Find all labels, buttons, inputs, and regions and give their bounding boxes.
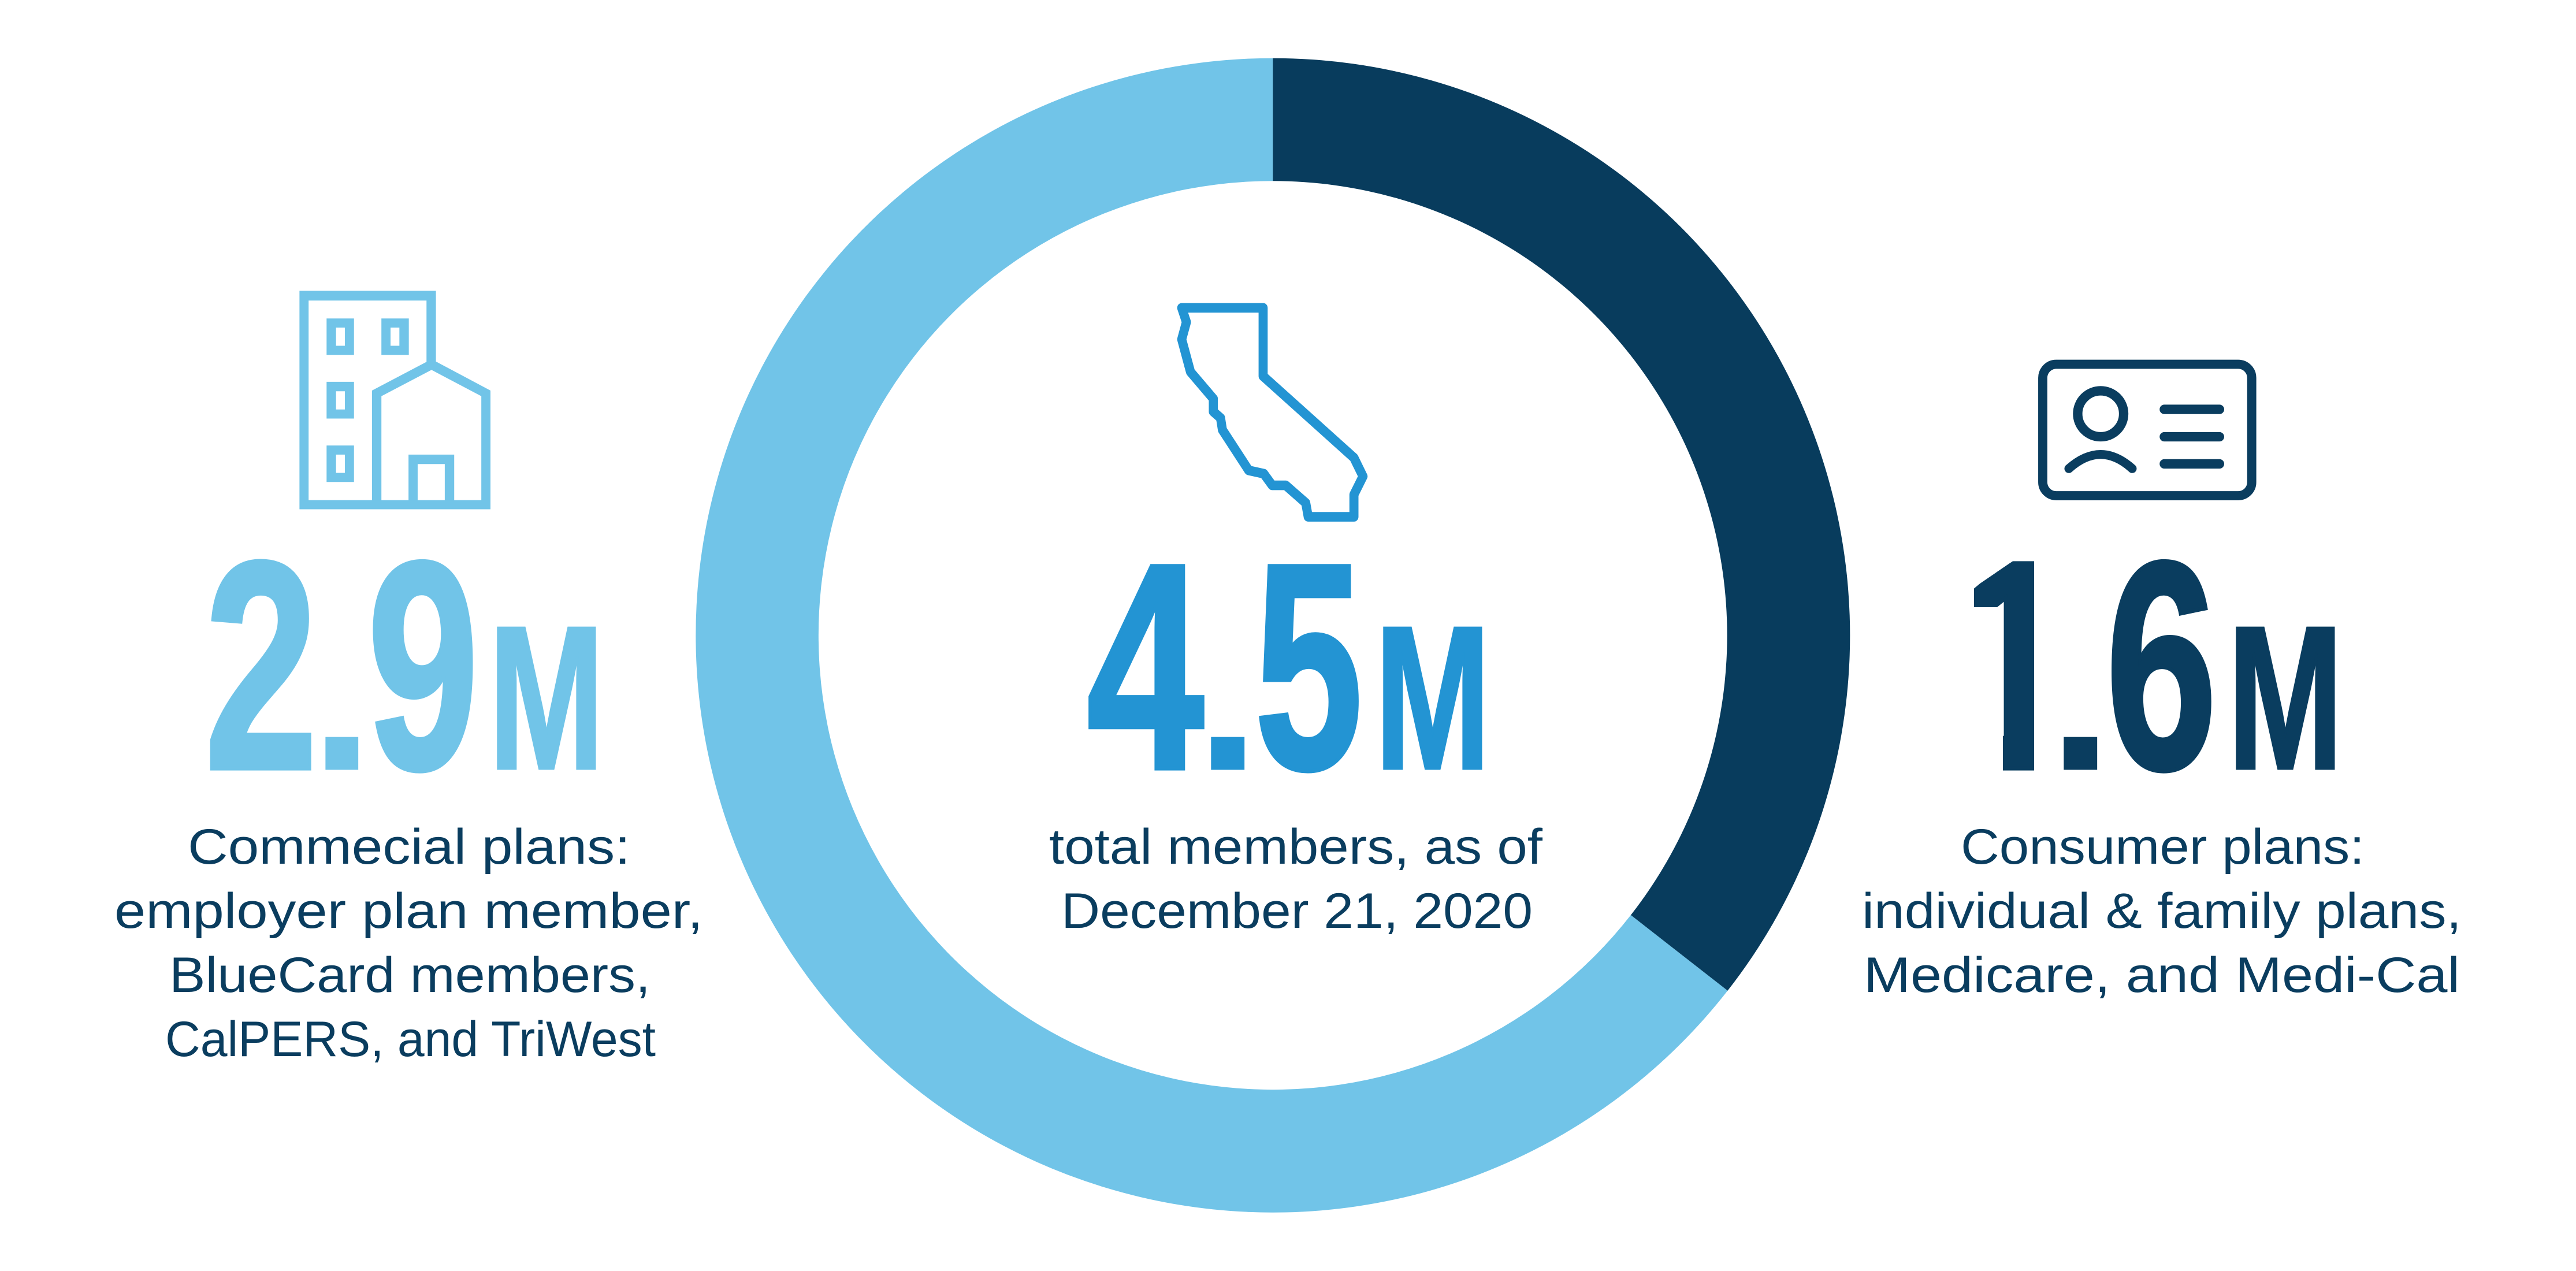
- caption: commercial plans description: [114, 819, 703, 1067]
- caption: total members date: total members, as of: [1049, 819, 1543, 875]
- caption: total members date: December 21, 2020: [1061, 883, 1533, 939]
- big number: 2.9M: 2: [205, 500, 318, 832]
- big number: 4.5M: M: [1375, 584, 1490, 812]
- caption: consumer plans description: [1862, 819, 2462, 1003]
- big number: 2.9M: .: [313, 586, 371, 811]
- panel: consumer plans: [1862, 365, 2462, 1003]
- big number: 4.5M: [1087, 502, 1490, 831]
- donut segment: consumer plans 1.6M: [1273, 58, 1850, 991]
- icon: member ID card: [2043, 365, 2252, 496]
- big number: 4.5M: .: [1198, 586, 1258, 811]
- big number: 2.9M: [205, 500, 604, 832]
- big number: 1.6M: 6: [2106, 500, 2217, 831]
- big number: 4.5M: 4: [1087, 502, 1206, 831]
- big number: 1.6M: 1: [1951, 499, 2080, 832]
- caption: commercial plans description: Commecial plans:: [188, 819, 630, 875]
- caption: commercial plans description: CalPERS, and TriWest: [165, 1012, 656, 1067]
- big number: 1.6M: [1974, 559, 2335, 774]
- big number: 2.9M: 9: [367, 500, 479, 831]
- donut segment: commercial plans 2.9M: [696, 58, 1727, 1213]
- big number: 1.6M: .: [2051, 586, 2110, 811]
- caption: consumer plans description: Consumer plans:: [1961, 819, 2365, 875]
- caption: commercial plans description: BlueCard members,: [169, 947, 650, 1003]
- icon: California outline: [1182, 308, 1363, 517]
- big number: 4.5M: 5: [1255, 503, 1363, 831]
- icon: office building: [299, 291, 490, 509]
- big number: 1.6M: M: [2228, 584, 2343, 812]
- caption: consumer plans description: Medicare, and Medi-Cal: [1864, 947, 2460, 1003]
- caption: total members date: [1049, 819, 1543, 939]
- big number: 2.9M: M: [489, 584, 604, 812]
- panel: commercial plans: [114, 291, 703, 1067]
- donut chart: total membership split: [696, 58, 1850, 1213]
- panel: total members: [1049, 308, 1543, 939]
- caption: consumer plans description: individual & family plans,: [1862, 883, 2462, 939]
- caption: commercial plans description: employer plan member,: [114, 883, 703, 939]
